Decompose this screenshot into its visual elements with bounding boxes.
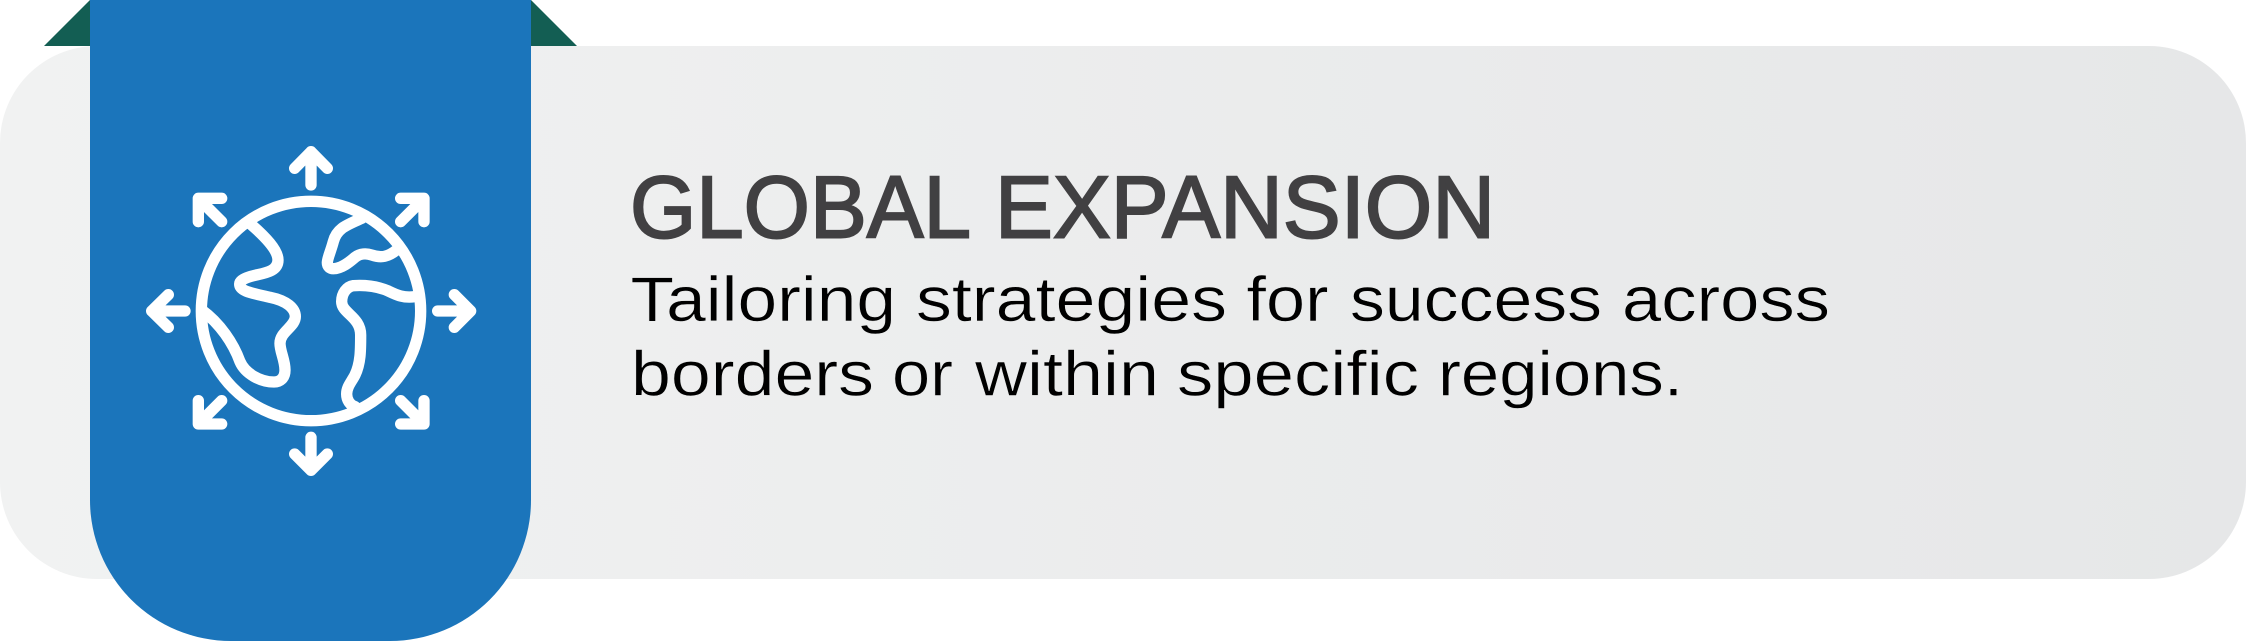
arrow: up-left <box>198 198 222 222</box>
icon: globe outline <box>201 201 421 421</box>
description line 2: borders <box>631 340 874 410</box>
description line 1: Tailoring <box>630 265 896 335</box>
description line 1 <box>630 265 1830 335</box>
icon: upper right continent <box>327 218 397 269</box>
heading: EXPANSION <box>995 158 1495 256</box>
description line 2: regions. <box>1438 340 1683 410</box>
description line 2 <box>631 340 1683 410</box>
heading <box>630 158 1495 256</box>
description line 2: or <box>892 340 953 410</box>
description line 2: specific <box>1177 340 1419 410</box>
description text <box>630 265 1830 410</box>
icon: globe with expansion arrows <box>152 152 471 470</box>
arrow: down <box>295 437 327 470</box>
arrow: down-left <box>198 401 222 424</box>
description line 1: success <box>1350 265 1602 335</box>
arrow: up <box>295 152 327 185</box>
description line 1: for <box>1246 265 1328 335</box>
icon: lower right continent <box>342 285 415 407</box>
heading: GLOBAL <box>630 158 971 256</box>
arrow: down-right <box>401 401 424 424</box>
arrow: left <box>152 295 185 327</box>
icon: left continent <box>202 225 295 382</box>
ribbon fold: left triangle <box>44 0 90 46</box>
arrow: up-right <box>401 198 424 222</box>
ribbon fold: right triangle <box>531 0 577 46</box>
description line 1: across <box>1622 265 1830 335</box>
blue ribbon <box>90 0 531 641</box>
arrow: right <box>438 295 471 327</box>
description line 2: within <box>974 340 1159 410</box>
description line 1: strategies <box>916 265 1227 335</box>
